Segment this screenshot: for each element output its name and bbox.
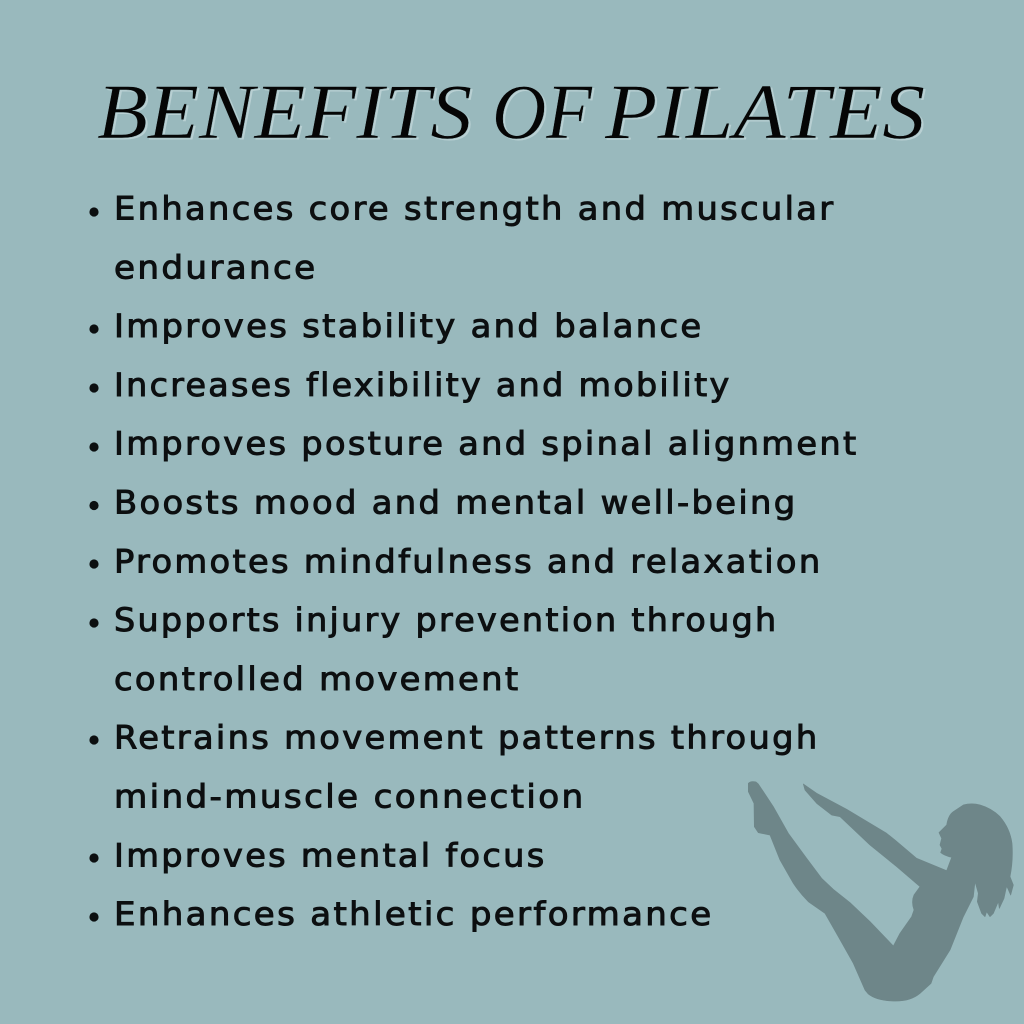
list item: core strength: endurance bbox=[114, 248, 318, 286]
list item: athletic performance: Enhances athletic performance bbox=[114, 895, 714, 933]
list item: injury prevention bbox=[89, 601, 778, 698]
list item: movement patterns: mind-muscle connection bbox=[114, 778, 586, 816]
list item: injury prevention: Supports injury prevention through bbox=[114, 601, 778, 639]
title: PILATES bbox=[604, 68, 925, 155]
title: OF bbox=[492, 68, 593, 155]
list item: flexibility: Increases flexibility and mobility bbox=[114, 366, 732, 404]
benefits list bbox=[89, 190, 858, 933]
list item: movement patterns bbox=[89, 719, 819, 816]
list item: injury prevention: controlled movement bbox=[114, 660, 520, 698]
title: PILATES bbox=[606, 70, 927, 156]
icon: pilates teaser silhouette bbox=[748, 782, 1013, 1001]
list item: stability: Improves stability and balance bbox=[114, 307, 704, 345]
list item: movement patterns: Retrains movement patterns through bbox=[114, 719, 820, 757]
title: BENEFITS bbox=[99, 70, 474, 156]
title: BENEFITS bbox=[97, 68, 472, 155]
list item: posture: Improves posture and spinal alignment bbox=[114, 425, 858, 463]
list item: mood: Boosts mood and mental well-being bbox=[114, 484, 798, 522]
list item: core strength bbox=[89, 190, 835, 286]
list item: mental focus: Improves mental focus bbox=[114, 836, 546, 874]
list item: core strength: Enhances core strength and muscular bbox=[114, 190, 836, 228]
title: OF bbox=[494, 70, 595, 156]
title bbox=[97, 68, 927, 156]
list item: mindfulness: Promotes mindfulness and relaxation bbox=[114, 542, 822, 580]
